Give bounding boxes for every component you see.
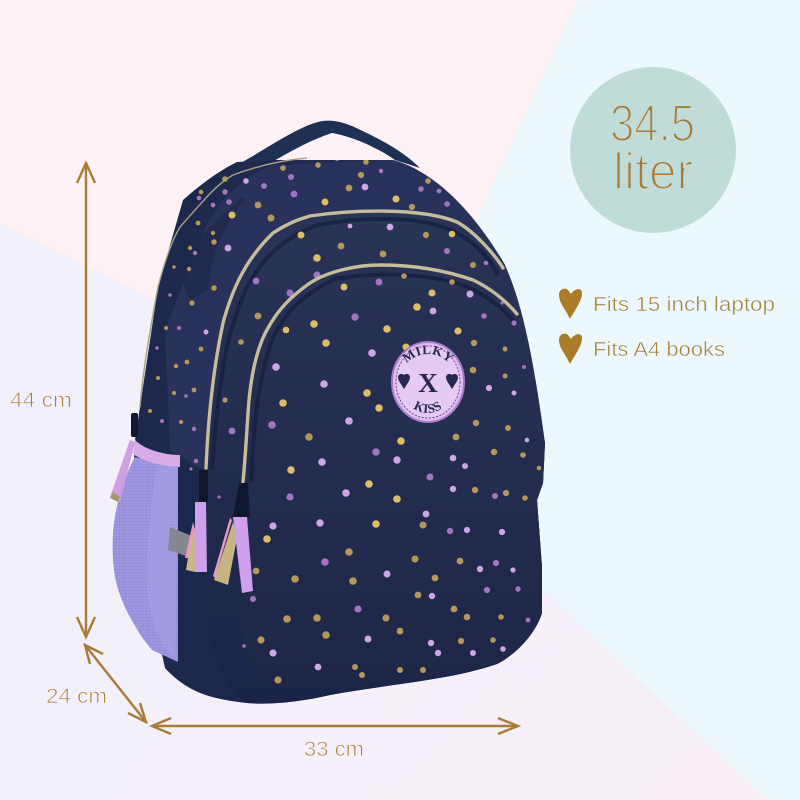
side zipper pull [110,413,138,502]
height label: 44 cm [10,389,72,412]
width label: 33 cm [304,738,364,761]
zipper pull left [185,470,208,572]
feature: books [559,334,725,364]
capacity text: 34.5 [610,95,695,153]
capacity text: liter [613,143,693,201]
feature: laptop: Fits 15 inch laptop [593,294,775,316]
height arrow [77,163,95,637]
badge: Milky Kiss: X [418,368,438,398]
polka dots [148,157,541,684]
top panel [165,160,505,470]
depth arrow [85,645,146,722]
lower band [165,460,247,703]
depth label: 24 cm [46,685,107,708]
reflective strip [168,527,192,558]
capacity text [610,95,695,201]
side mesh pocket [113,440,180,662]
width arrow [152,718,518,734]
zipper: middle compartment [206,211,503,468]
handle [237,121,420,168]
pocket trim [133,440,180,467]
badge: Milky Kiss: KISS [413,400,441,413]
mid panel [203,210,545,704]
zipper: outer back [140,158,307,407]
feature: books: Fits A4 books [593,339,725,361]
zipper: front compartment [243,265,517,482]
shoulder shadow [175,197,245,300]
front panel [242,265,545,690]
badge: Milky Kiss [391,341,465,423]
seam shadows [212,219,514,482]
badge: Milky Kiss: MILKY [402,346,454,363]
body silhouette [132,160,545,704]
capacity circle [570,67,736,233]
feature: laptop [559,289,775,319]
zipper pull right [213,483,253,593]
backpack [110,120,545,704]
